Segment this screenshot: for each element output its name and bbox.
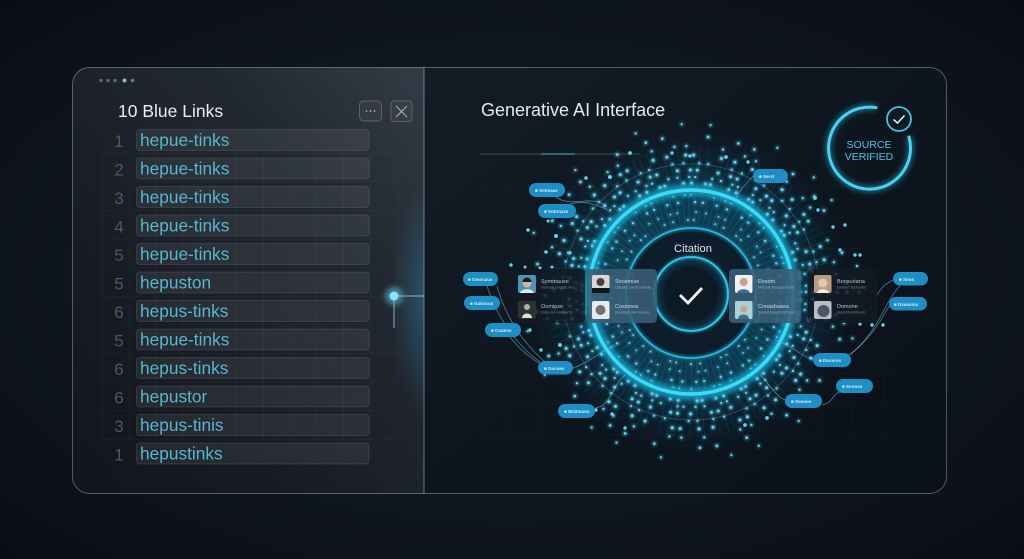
pill bbox=[538, 204, 576, 218]
pill: ■ Gmocaus bbox=[468, 277, 493, 282]
source cards: inner right: Mnoost Ibacosstnoos bbox=[758, 286, 794, 290]
pill: ■ Coatms bbox=[491, 328, 512, 333]
avatar bbox=[814, 301, 832, 319]
row 11: hepus-tinis bbox=[140, 415, 224, 435]
source cards: far left bbox=[513, 269, 585, 323]
infographic canvas bbox=[72, 54, 947, 506]
row 5 bbox=[114, 244, 369, 265]
source cards: far right: Bonsuriana bbox=[837, 279, 866, 285]
pill: ■ Gocues bbox=[544, 366, 565, 371]
pill bbox=[485, 323, 521, 337]
row 10: 6 bbox=[114, 388, 124, 408]
top rule bbox=[480, 153, 640, 155]
pill bbox=[889, 297, 927, 310]
heading: Generative AI Interface: Generative AI Interface bbox=[481, 100, 665, 120]
row 2 bbox=[114, 158, 369, 180]
source cards: far left: Datecnd cnalaartts bbox=[541, 310, 573, 314]
list of links bbox=[114, 130, 369, 464]
pill bbox=[464, 296, 500, 310]
pill: ■ Snos bbox=[899, 277, 914, 282]
source cards: inner right: Eosom bbox=[758, 279, 776, 285]
glow halo bbox=[526, 127, 856, 457]
pill: ■ Doosres bbox=[819, 358, 841, 363]
pill bbox=[753, 169, 788, 183]
source cards: inner left: Dasdnc sacrtl sotnste bbox=[615, 286, 651, 290]
row 8: hepue-tinks bbox=[140, 330, 230, 350]
particle field bbox=[523, 124, 859, 460]
pill bbox=[558, 404, 595, 418]
icon: check mark bbox=[680, 288, 702, 303]
row 3: 3 bbox=[114, 189, 124, 208]
source cards: far left: Oomiose bbox=[541, 304, 563, 310]
pill: ■ Dsaosins bbox=[894, 302, 918, 307]
row 11: 3 bbox=[114, 417, 124, 436]
row 8: 5 bbox=[114, 332, 124, 350]
connector lines bbox=[487, 176, 900, 408]
row 12: hepustinks bbox=[140, 444, 223, 464]
pill: ■ Soosos bbox=[791, 399, 812, 404]
row 6: hepuston bbox=[140, 272, 211, 292]
pill bbox=[893, 272, 928, 286]
row 9: hepus-tinks bbox=[140, 358, 229, 378]
tag pills bbox=[463, 169, 928, 418]
row 6 bbox=[114, 272, 369, 294]
source cards: far left: Sommause bbox=[541, 279, 569, 285]
badge: source verified: SOURCE bbox=[847, 139, 891, 151]
badge: source verified bbox=[829, 107, 911, 189]
row 1: hepue-tinks bbox=[140, 130, 230, 150]
avatar bbox=[592, 301, 610, 319]
panel: generative AI interface bbox=[463, 100, 928, 460]
row 7: 6 bbox=[114, 303, 124, 322]
middle ring bbox=[626, 228, 756, 358]
source cards: inner right bbox=[729, 269, 801, 323]
row 9: 6 bbox=[114, 360, 124, 379]
pill bbox=[529, 183, 565, 197]
pill: ■ Gatiocus bbox=[470, 301, 494, 306]
row 2: 2 bbox=[114, 160, 124, 180]
source cards: inner left: Cossmea bbox=[615, 304, 639, 310]
source cards: inner right: Sesorl Ssaptbrtrfratns bbox=[758, 310, 795, 314]
avatar bbox=[518, 301, 536, 319]
row 5: 5 bbox=[114, 246, 124, 265]
pill: ■ Wsitmoso bbox=[564, 409, 590, 414]
pill: ■ Snoose bbox=[842, 384, 863, 389]
pill: ■ Sotrmaze bbox=[544, 209, 569, 214]
pill: ■ Serst bbox=[759, 174, 775, 179]
row 10 bbox=[114, 386, 369, 408]
panel: comparison frame bbox=[72, 67, 947, 494]
badge: source verified: VERIFIED bbox=[845, 151, 894, 163]
radial ticks bbox=[566, 167, 816, 417]
avatar bbox=[518, 275, 536, 293]
source cards: inner left: Blandnd sive toousn bbox=[615, 310, 649, 314]
row 3 bbox=[114, 186, 369, 208]
row 6: 5 bbox=[114, 274, 124, 294]
pill bbox=[538, 361, 573, 374]
pill bbox=[785, 394, 822, 408]
row 4: hepue-tinks bbox=[140, 216, 230, 236]
row 11 bbox=[114, 414, 369, 436]
source cards: far right: Ipastcrtranrtoont bbox=[837, 310, 866, 314]
row 8 bbox=[114, 329, 369, 350]
row 1: 1 bbox=[114, 132, 124, 151]
source cards: far right: Domone bbox=[837, 304, 858, 310]
button: close bbox=[391, 101, 412, 122]
row 3: hepue-tinks bbox=[140, 187, 230, 207]
avatar bbox=[814, 275, 832, 293]
row 2: hepue-tinks bbox=[140, 158, 230, 178]
window dots bbox=[99, 78, 134, 82]
heading: 10 Blue Links: 10 Blue Links bbox=[118, 101, 223, 121]
row 12: 1 bbox=[114, 446, 124, 464]
panel: 10 blue links bbox=[99, 78, 424, 464]
row 10: hepustor bbox=[140, 386, 207, 406]
source cards: inner left: Soosmise bbox=[615, 279, 639, 285]
source cards: far left: Gonase cngaist fino bbox=[541, 286, 575, 290]
row 4 bbox=[114, 215, 369, 236]
pill bbox=[813, 353, 851, 367]
avatar bbox=[735, 301, 752, 319]
row 4: 4 bbox=[114, 218, 124, 236]
label: Citation: Citation bbox=[674, 243, 712, 255]
pill bbox=[463, 272, 498, 286]
row 1 bbox=[114, 130, 369, 151]
source cards: inner right: Cnoasbaasa bbox=[758, 304, 790, 310]
thin orbit bbox=[563, 164, 819, 420]
stray particles bbox=[509, 151, 885, 430]
row 9 bbox=[114, 358, 369, 379]
avatar bbox=[592, 275, 610, 293]
inner ring bbox=[654, 257, 728, 331]
avatar bbox=[735, 275, 752, 293]
source cards: far right: Isotnert Iastsortor bbox=[837, 286, 867, 290]
button: more bbox=[360, 101, 382, 121]
pill: ■ Sotmase bbox=[535, 188, 558, 193]
outer ring bbox=[589, 190, 793, 394]
row 12 bbox=[114, 443, 369, 464]
row 7 bbox=[114, 300, 369, 322]
right grid bbox=[480, 155, 910, 440]
connector node bbox=[385, 287, 424, 328]
source cards: inner left bbox=[587, 269, 657, 323]
citation diagram bbox=[463, 124, 928, 460]
row 5: hepue-tinks bbox=[140, 244, 230, 264]
source cards: far right bbox=[808, 269, 877, 323]
row 7: hepus-tinks bbox=[140, 301, 229, 321]
pill bbox=[836, 379, 873, 393]
left grid bbox=[102, 153, 402, 443]
